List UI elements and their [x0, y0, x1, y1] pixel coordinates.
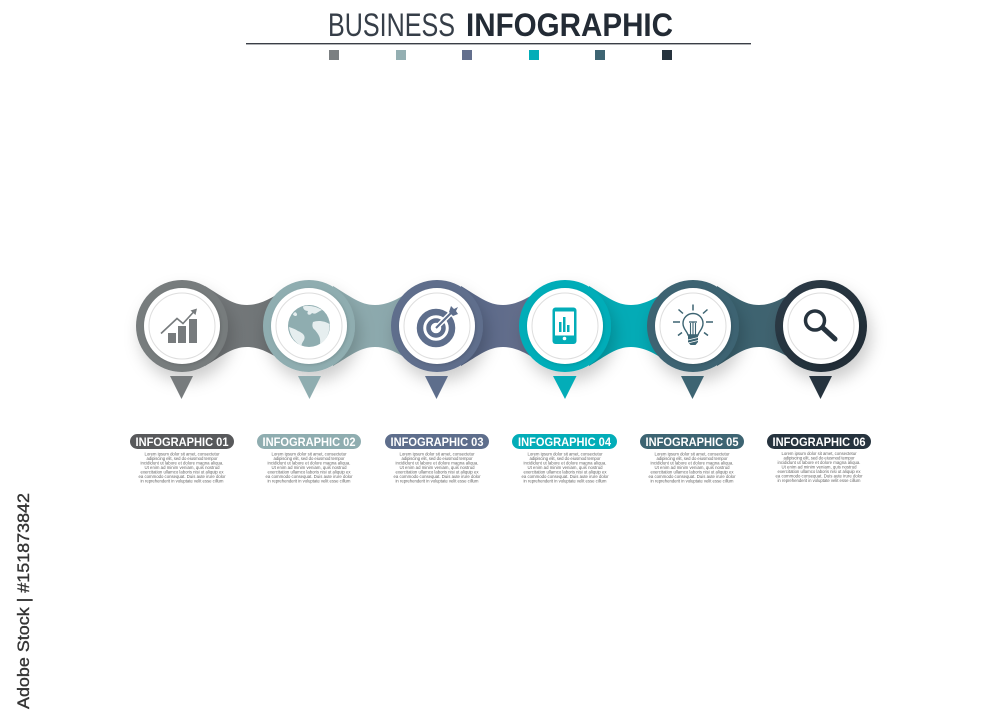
step 5 marker [647, 280, 739, 399]
pointer [170, 376, 193, 399]
panel: infographic 02 text: incididunt ut labore et dolore magna aliqua. [268, 460, 350, 466]
panel: infographic 02 text: Lorem ipsum dolor sit amet, consectetur [272, 452, 347, 456]
icon: magnifying glass [806, 311, 835, 339]
panel: infographic 05 text: Ut enim ad minim veniam, quis nostrud [654, 465, 730, 470]
panel: infographic 01 text: exercitation ullamco laboris nisi ut aliquip ex [140, 470, 224, 474]
panel: infographic 01 text: INFOGRAPHIC 01 [136, 435, 229, 449]
connector 5 [717, 286, 802, 366]
panel: infographic 04 text: adipiscing elit, sed do eiusmod tempor [530, 456, 601, 461]
panel: infographic 03 text: Lorem ipsum dolor sit amet, consectetur [400, 452, 475, 456]
panel: infographic 02 text: INFOGRAPHIC 02 [262, 435, 356, 449]
panel: infographic 06 text [767, 434, 871, 483]
panel: infographic 04 text: INFOGRAPHIC 04 [518, 435, 611, 449]
pointer [681, 376, 704, 399]
panel: infographic 06 text: Lorem ipsum dolor sit amet, consectetur [782, 451, 857, 456]
panel: infographic 02 text: exercitation ullamco laboris nisi ut aliquip ex [268, 470, 351, 474]
panel: infographic 04 text: Ut enim ad minim veniam, quis nostrud [528, 465, 603, 470]
panel: infographic 02 text: ea commodo consequat. Duis aute irure dolor [266, 474, 353, 479]
panel: infographic 02 text [257, 434, 361, 484]
panel: infographic 06 text: exercitation ullamco laboris nisi ut aliquip ex [778, 469, 861, 474]
panel: infographic 02 text: Ut enim ad minim veniam, quis nostrud [272, 465, 347, 470]
panel: infographic 05 text [640, 434, 744, 484]
pointer [809, 376, 832, 399]
panel: infographic 05 text: incididunt ut labore et dolore magna aliqua. [650, 460, 734, 466]
panel: infographic 04 text: ea commodo consequat. Duis aute irure dolor [522, 474, 609, 479]
panel: infographic 04 text: exercitation ullamco laboris nisi ut aliquip ex [524, 470, 607, 474]
pointer [298, 376, 321, 399]
step 2 marker [263, 280, 355, 399]
panel: infographic 02 text: adipiscing elit, sed do eiusmod tempor [274, 456, 345, 461]
panel: infographic 04 text: incididunt ut labore et dolore magna aliqua. [524, 460, 606, 466]
connector 3 [461, 286, 546, 366]
step 1 marker [136, 280, 228, 399]
panel: infographic 03 text: Ut enim ad minim veniam, quis nostrud [400, 465, 475, 470]
colour key squares [329, 50, 672, 60]
panel: infographic 01 text: Lorem ipsum dolor sit amet, consectetur [144, 452, 220, 456]
panel: infographic 04 text: Lorem ipsum dolor sit amet, consectetur [528, 452, 603, 456]
icon: light bulb [673, 304, 713, 345]
panel: infographic 05 text: in reprehenderit in voluptate velit esse cillum [650, 478, 734, 484]
stock id label: Adobe Stock | #151873842 [14, 493, 33, 709]
panel: infographic 03 text: incididunt ut labore et dolore magna aliqua. [396, 460, 478, 466]
panel: infographic 01 text [130, 434, 234, 484]
step 3 marker [391, 280, 483, 399]
panel: infographic 06 text: incididunt ut labore et dolore magna aliqua. [778, 460, 860, 465]
icon: phone with chart [552, 308, 576, 344]
panel: infographic 03 text: INFOGRAPHIC 03 [390, 435, 484, 449]
panel: infographic 05 text: ea commodo consequat. Duis aute irure dolor [648, 474, 736, 479]
panel: infographic 06 text: INFOGRAPHIC 06 [772, 435, 866, 449]
panel: infographic 03 text: ea commodo consequat. Duis aute irure dolor [394, 474, 481, 479]
panel: infographic 04 text: in reprehenderit in voluptate velit esse cillum [524, 478, 607, 484]
title [328, 7, 673, 43]
step 6 marker [775, 280, 867, 399]
panel: infographic 01 text: ea commodo consequat. Duis aute irure dolor [138, 474, 226, 479]
panel: infographic 01 text: incididunt ut labore et dolore magna aliqua. [140, 460, 224, 466]
icon: bar chart with arrow [161, 308, 197, 343]
icon: target with arrow [420, 306, 458, 344]
panel: infographic 06 text: in reprehenderit in voluptate velit esse cillum [778, 478, 861, 483]
panel: infographic 06 text: adipiscing elit, sed do eiusmod tempor [784, 456, 855, 460]
icon: globe [288, 305, 330, 347]
panel: infographic 05 text: Lorem ipsum dolor sit amet, consectetur [654, 452, 730, 456]
panel: infographic 03 text [385, 434, 489, 484]
panel: infographic 01 text: in reprehenderit in voluptate velit esse cillum [140, 478, 224, 484]
panel: infographic 01 text: adipiscing elit, sed do eiusmod tempor [146, 456, 218, 461]
title: BUSINESS [328, 7, 455, 43]
connector 2 [333, 286, 418, 366]
panel: infographic 03 text: exercitation ullamco laboris nisi ut aliquip ex [396, 470, 479, 474]
panel: infographic 05 text: INFOGRAPHIC 05 [646, 435, 739, 449]
connector 1 [205, 286, 290, 366]
panel: infographic 05 text: adipiscing elit, sed do eiusmod tempor [656, 456, 728, 461]
title: INFOGRAPHIC [466, 7, 673, 43]
panel: infographic 05 text: exercitation ullamco laboris nisi ut aliquip ex [650, 470, 734, 474]
pointer [425, 376, 448, 399]
panel: infographic 06 text: Ut enim ad minim veniam, quis nostrud [782, 464, 857, 470]
step 4 marker [519, 280, 611, 399]
panel: infographic 02 text: in reprehenderit in voluptate velit esse cillum [268, 478, 351, 484]
connector 4 [589, 286, 674, 366]
panel: infographic 03 text: adipiscing elit, sed do eiusmod tempor [402, 456, 473, 461]
pointer [553, 376, 576, 399]
panel: infographic 01 text: Ut enim ad minim veniam, quis nostrud [144, 465, 220, 470]
panel: infographic 04 text [512, 434, 617, 484]
panel: infographic 06 text: ea commodo consequat. Duis aute irure dolor [776, 474, 863, 478]
panel: infographic 03 text: in reprehenderit in voluptate velit esse cillum [396, 478, 479, 484]
